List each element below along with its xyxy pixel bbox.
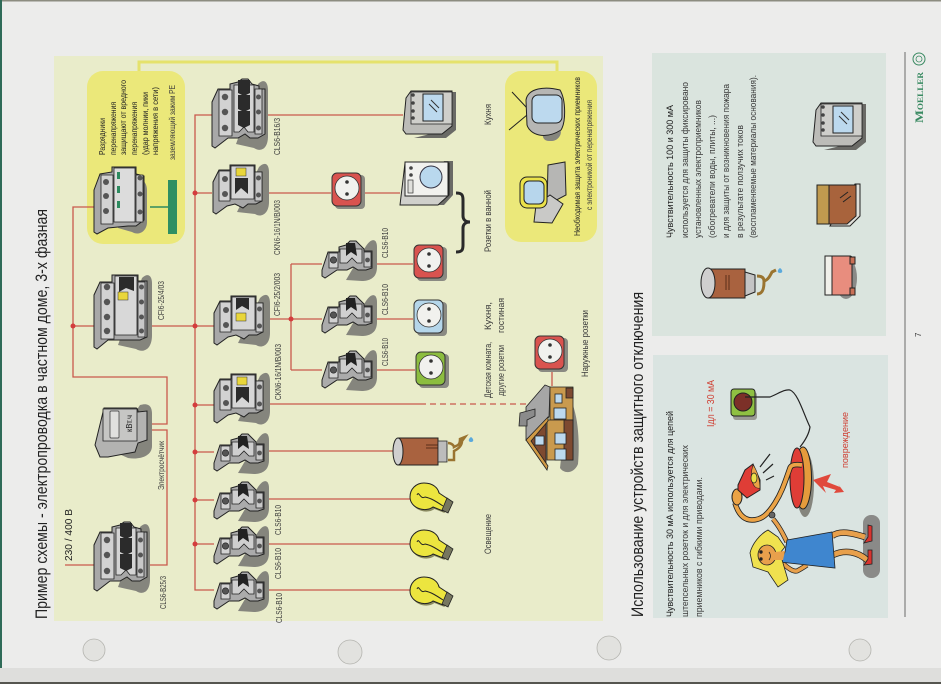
breaker: lighting 3 — [214, 571, 269, 612]
room labels: Розетки в ванной — [483, 190, 493, 252]
icon: radiator — [825, 256, 857, 299]
voltage label: 230 / 400 В — [64, 509, 75, 561]
device labels: CFI6-25/2/003 — [273, 273, 282, 316]
callout text: surge arrester: защищают от вредного — [119, 80, 128, 155]
icon: blue socket — [414, 300, 447, 336]
illustration: lamp — [732, 454, 774, 505]
room labels: Наружные розетки — [580, 310, 590, 377]
breaker: CKN6-16/1N/B/003 outdoor — [214, 373, 270, 424]
room labels: Освещение — [483, 514, 493, 554]
label: I = 30 mA: Iдл = 30 мА — [706, 380, 717, 427]
earth terminal bar — [168, 180, 177, 234]
breaker: lighting 1 — [214, 481, 269, 522]
breaker: CKN6-16/1N/B/003 bath — [213, 164, 269, 216]
text: 30 mA: приемников с гибкими приводами. — [694, 477, 705, 617]
text: 30 mA: штепсельных розеток и для электрических — [680, 445, 691, 617]
meter unit: кВт.ч — [125, 415, 134, 432]
device labels: CLS6-B10 — [381, 284, 390, 315]
callout text: surge arrester: Разрядники — [98, 118, 107, 155]
callout text: surge arrester: перенапряжения — [130, 102, 139, 155]
device labels: CFI6-25/4/03 — [157, 281, 166, 320]
icon: TV — [509, 88, 565, 141]
room labels: Кухня, — [483, 302, 493, 330]
device labels — [157, 118, 390, 623]
device labels: Электросчётчик — [157, 441, 166, 490]
logo: Moeller: Moeller — [912, 72, 926, 123]
icon: microwave — [817, 184, 860, 226]
icon: red socket bath 2 — [414, 245, 447, 281]
icon: green socket — [416, 352, 449, 388]
panel: 100/300 mA background — [652, 53, 886, 336]
breaker: sockets 3 — [322, 350, 377, 391]
text: 100 and 300 mA: используется для защиты фиксировано — [680, 82, 691, 238]
text: 100 and 300 mA — [665, 75, 759, 238]
icon: stove — [403, 91, 456, 138]
device labels: CLS6-B10 — [274, 548, 283, 579]
room labels: Детская комната, — [483, 342, 493, 398]
text: 100 and 300 mA: в результате ползучих токов — [735, 125, 746, 238]
icon: house — [519, 385, 579, 472]
illustration: cord — [745, 390, 810, 447]
label: damage: повреждение — [840, 412, 851, 468]
breaker: CLS6-B16/3 — [212, 79, 268, 150]
callout: surge arrester — [87, 71, 185, 244]
title: Пример схемы - электропроводка в частном доме, 3-х фазная — [32, 209, 51, 619]
callout text: surge arrester — [98, 80, 177, 160]
breaker: heater — [214, 433, 269, 474]
icon: red outdoor socket — [535, 336, 568, 372]
text: 100 and 300 mA: (обогреватели воды, плиты, ...) — [707, 115, 718, 238]
icon: computer — [520, 162, 566, 223]
breaker: lighting 2 — [214, 526, 269, 567]
room labels: гостиная — [496, 298, 506, 333]
panel: 30 mA background — [653, 355, 888, 618]
device labels: CKN6-16/1N/B/003 — [273, 200, 282, 255]
junction dots — [70, 190, 294, 546]
icon: water heater large — [701, 268, 782, 298]
surge arrester — [94, 167, 147, 234]
page number: 7 — [914, 332, 923, 337]
room labels: другие розетки — [496, 345, 506, 396]
breaker: CFI6-25/2/003 — [214, 295, 270, 346]
callout: electronics protection — [505, 71, 597, 242]
text: 30 mA: Чувствительность 30 мА используется для цепей — [665, 411, 676, 617]
device labels: CLS6-B10 — [381, 228, 390, 258]
icon: bulb 2 — [410, 530, 453, 560]
breaker: CLS6-B25/3 — [94, 522, 150, 593]
device labels: CLS6-B10 — [274, 505, 283, 535]
icon: washing machine — [400, 161, 453, 205]
callout text: electronics protection — [573, 77, 594, 236]
callout text: surge arrester: перенапряжения — [109, 102, 118, 155]
wiring — [65, 115, 552, 590]
text: 30 mA — [665, 411, 705, 617]
device labels: CLS6-B25/3 — [159, 576, 168, 609]
device labels: CKN6-16/1N/B/003 — [274, 344, 283, 400]
illustration: damaged appliance — [735, 447, 814, 520]
text: 100 and 300 mA: (воспламеняемые материалы основания). — [748, 75, 759, 238]
callout text: electronics protection: Необходимая защита электрических приемников — [573, 77, 582, 236]
panel: wiring diagram background — [54, 56, 603, 621]
device labels: CLS6-B10 — [381, 338, 390, 366]
yellow link between surge callouts — [139, 62, 557, 72]
text: 100 and 300 mA: Чувствительность 100 и 300 мА — [665, 104, 676, 238]
icon: stove large — [813, 103, 866, 150]
icon: red socket bath 1 — [332, 173, 365, 209]
text: 100 and 300 mA: и для защиты от возникновения пожара — [721, 83, 732, 238]
breaker: sockets 2 — [322, 295, 377, 336]
logo: Moeller — [912, 53, 926, 123]
RCD: CFI6-25/4/03 — [94, 275, 152, 351]
callout text: surge arrester: (удар молнии, пики — [141, 92, 150, 155]
brace — [456, 193, 470, 252]
icon: water heater — [393, 437, 473, 465]
breaker: sockets 1 — [322, 240, 377, 281]
meter — [95, 404, 152, 458]
room labels: Кухня — [483, 104, 493, 125]
illustration: lightning — [813, 474, 844, 493]
room labels — [483, 104, 590, 554]
icon: bulb 3 — [410, 577, 453, 607]
illustration: socket with plug — [731, 389, 757, 420]
device labels: CLS6-B16/3 — [273, 118, 282, 155]
heading: protective devices: Использование устройств защитного отключения — [628, 292, 647, 617]
footer rule — [904, 52, 906, 617]
text: 100 and 300 mA: установленных электроприемников — [693, 100, 704, 238]
illustration: woman — [750, 512, 880, 587]
callout text: surge arrester: заземляющий зажим PE — [168, 85, 177, 160]
callout text: surge arrester: напряжения в сети) — [151, 87, 160, 155]
icon: bulb 1 — [410, 483, 453, 513]
callout text: electronics protection: с электроникой от перенапряжения — [585, 100, 594, 210]
binder holes — [83, 636, 871, 664]
device labels: CLS6-B10 — [275, 593, 284, 623]
